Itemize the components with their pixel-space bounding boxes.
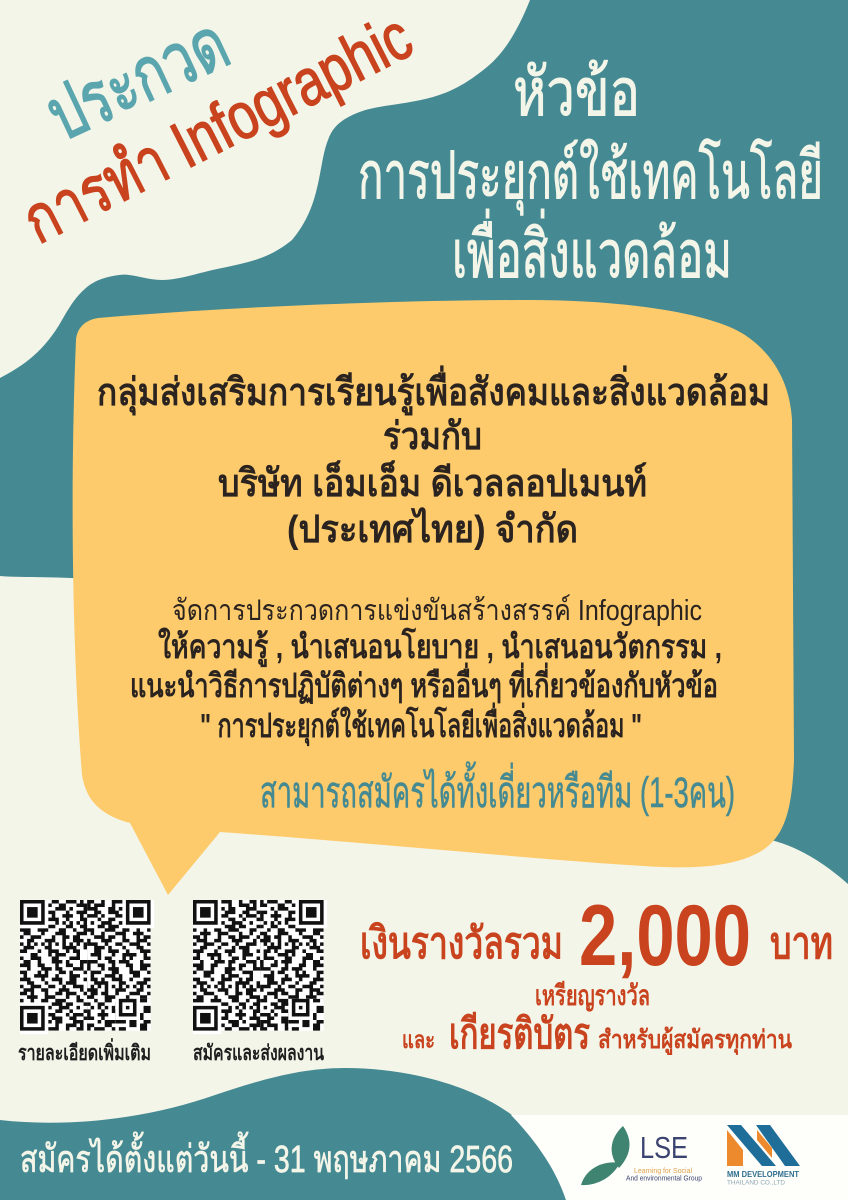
topic heading [358,55,823,291]
organizer text block: ร่วมกับ [383,416,482,458]
logo: LSE [581,1126,702,1185]
speech bubble [73,300,794,895]
QR label: details: รายละเอียดเพิ่มเติม [18,1037,151,1065]
certificate line: เกียรติบัตร [449,1010,590,1057]
logo: LSE: LSE [640,1130,688,1165]
QR code: details [20,900,154,1034]
topic heading: หัวข้อ [513,55,640,129]
medal line: เหรียญรางวัล [535,980,650,1012]
certificate line: สำหรับผู้สมัครทุกท่าน [598,1026,792,1056]
logo: MM Development: THAILAND CO.,LTD [727,1180,785,1186]
certificate line [402,1010,792,1057]
contest description: " การประยุกต์ใช้เทคโนโลยีเพื่อสิ่งแวดล้อม " [200,702,642,747]
deadline: สมัครได้ตั้งแต่วันนี้ - 31 พฤษภาคม 2566 [20,1131,513,1181]
organizer text block: กลุ่มส่งเสริมการเรียนรู้เพื่อสังคมและสิ่งแวดล้อม [97,365,770,416]
prize amount: เงินรางวัลรวม [360,919,563,968]
prize amount: 2,000 [579,888,751,984]
certificate line: และ [402,1027,435,1054]
teal background shape [0,0,848,884]
organizer text block: (ประเทศไทย) จำกัด [287,507,578,551]
organizer text block [97,365,770,551]
prize amount [360,888,833,984]
contest description: จัดการประกวดการแข่งขันสร้างสรรค์ Infographic [172,594,702,627]
bottom teal band [0,1068,566,1200]
logo: LSE: And environmental Group [626,1174,702,1182]
logo: MM Development [727,1125,800,1186]
contest description [130,594,722,747]
logo white panel [511,1115,848,1200]
organizer text block: บริษัท เอ็มเอ็ม ดีเวลลอปเมนท์ [218,460,647,505]
logo: LSE: Learning for Social [634,1166,692,1175]
QR label: apply and submit: สมัครและส่งผลงาน [193,1042,324,1065]
QR code: apply and submit [193,900,327,1034]
logo: MM Development: MM DEVELOPMENT [727,1169,800,1179]
contest description: ให้ความรู้ , นำเสนอนโยบาย , นำเสนอนวัตกรรม , [158,627,722,668]
